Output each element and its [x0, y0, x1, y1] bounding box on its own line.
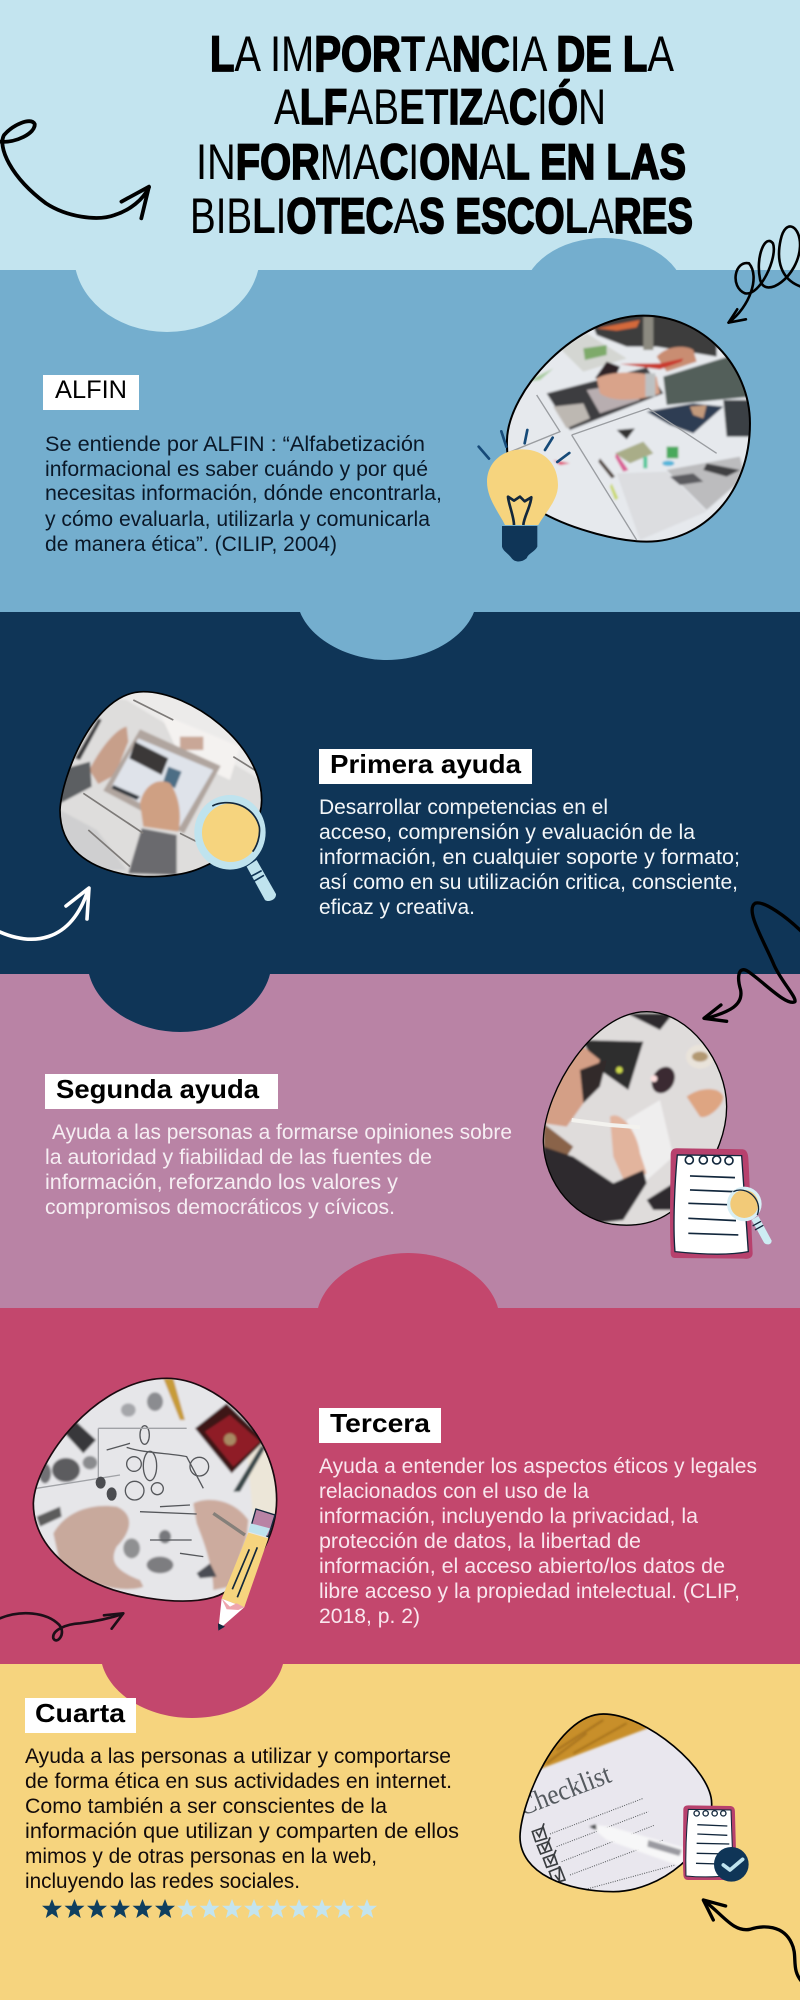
text: ALFIN definition: informacional es saber cuándo y por qué: [45, 458, 428, 481]
icon: notepad with magnifier: [670, 1148, 772, 1259]
text: ALFIN definition: y cómo evaluarla, utilizarla y comunicarla: [45, 508, 430, 531]
text: Primera ayuda description: eficaz y creativa.: [319, 896, 475, 919]
text: Tercera description: información, el acceso abierto/los datos de: [319, 1555, 725, 1578]
text: Primera ayuda description: información, en cualquier soporte y formato;: [319, 846, 740, 869]
photo: woman with pen at desk: [540, 1010, 730, 1230]
text: Segunda ayuda description: la autoridad y fiabilidad de las fuentes de: [45, 1146, 432, 1169]
photo: jewellery sketches: [32, 1377, 280, 1607]
text: Segunda ayuda description: información, reforzando los valores y: [45, 1171, 398, 1194]
panel: Cuarta background: [0, 1664, 800, 2000]
label: ALFIN: ALFIN: [55, 376, 127, 404]
text: Tercera description: libre acceso y la propiedad intelectual. (CLIP,: [319, 1580, 740, 1603]
arrow: black squiggle to Segunda photo: [704, 903, 800, 1021]
icon: notepad with check badge: [683, 1805, 749, 1882]
title: BIBLIOTECAS ESCOLARES: [190, 188, 693, 244]
title: [190, 26, 693, 244]
text: ALFIN definition: necesitas información, dónde encontrarla,: [45, 482, 442, 505]
photo: hand on tablet: [57, 690, 267, 880]
icon: pencil: [218, 1509, 275, 1631]
text: Tercera description: Ayuda a entender los aspectos éticos y legales: [319, 1455, 757, 1478]
text: Cuarta description: incluyendo las redes sociales.: [25, 1870, 300, 1893]
text: Primera ayuda description: acceso, comprensión y evaluación de la: [319, 821, 695, 844]
text: Tercera description: protección de datos, la libertad de: [319, 1530, 641, 1553]
text: ALFIN definition: Se entiende por ALFIN : “Alfabetización: [45, 433, 425, 456]
photo: checklist with pen: [514, 1710, 717, 1897]
text: Cuarta description: mimos y de otras personas en la web,: [25, 1845, 377, 1868]
label: Primera ayuda: Primera ayuda: [330, 749, 522, 779]
text: Primera ayuda description: así como en su utilización critica, consciente,: [319, 871, 738, 894]
text: ALFIN definition: [45, 433, 442, 556]
text: Segunda ayuda description: compromisos democráticos y cívicos.: [45, 1196, 395, 1219]
panel: header background: [0, 0, 800, 270]
icon: light bulb: [479, 430, 569, 562]
text: Segunda ayuda description: [45, 1121, 512, 1219]
arrow: header right scribble: [729, 226, 800, 323]
panel: Primera ayuda background: [0, 612, 800, 975]
text: Cuarta description: Ayuda a las personas a utilizar y comportarse: [25, 1745, 451, 1768]
text: Cuarta description: [25, 1745, 459, 1893]
arrow: raspberry squiggle: [0, 1613, 123, 1640]
panel: Segunda ayuda background: [0, 974, 800, 1308]
decorative bump: Tercera into Segunda: [318, 1253, 498, 1308]
panel: ALFIN background: [0, 238, 800, 612]
label: Cuarta: [25, 1698, 136, 1733]
photo: hands over magazines: [503, 310, 753, 547]
title: ALFABETIZACIÓN: [274, 79, 606, 135]
text: Tercera description: 2018, p. 2): [319, 1605, 420, 1628]
text: Segunda ayuda description: Ayuda a las personas a formarse opiniones sobre: [52, 1121, 512, 1144]
arrow: white curve: [0, 888, 89, 939]
text: Cuarta description: de forma ética en sus actividades en internet.: [25, 1770, 452, 1793]
text: Tercera description: relacionados con el uso de la: [319, 1480, 589, 1503]
title: LA IMPORTANCIA DE LA: [210, 26, 675, 82]
text: Primera ayuda description: Desarrollar competencias en el: [319, 796, 608, 819]
label: Tercera: Tercera: [330, 1408, 431, 1438]
arrow: squiggle to Cuarta photo: [703, 1900, 800, 1983]
text: Primera ayuda description: [319, 796, 740, 919]
text: Cuarta description: Como también a ser conscientes de la: [25, 1795, 387, 1818]
label: Cuarta: Cuarta: [35, 1698, 126, 1728]
text: Tercera description: [319, 1455, 757, 1628]
text: Tercera description: información, incluyendo la privacidad, la: [319, 1505, 698, 1528]
text: ALFIN definition: de manera ética”. (CILIP, 2004): [45, 533, 337, 556]
decorative bump: Tercera into Cuarta: [102, 1664, 283, 1718]
label: ALFIN: [43, 375, 139, 410]
decorative bump: ALFIN into Primera ayuda: [300, 612, 474, 660]
arrow: header left swirl: [0, 121, 149, 218]
panel: Tercera background: [0, 1308, 800, 1664]
title: INFORMACIONAL EN LAS: [196, 134, 686, 190]
decorative notch: header into ALFIN: [74, 178, 260, 332]
label: Tercera: [319, 1408, 441, 1443]
text: Cuarta description: información que utilizan y comparten de ellos: [25, 1820, 459, 1843]
icon: magnifying glass: [194, 795, 276, 901]
rating stars: [42, 1899, 377, 1918]
decorative bump: Primera into Segunda: [89, 974, 270, 1032]
label: Segunda ayuda: Segunda ayuda: [56, 1074, 260, 1104]
photo: checklist with pen: Checklist: [514, 1759, 616, 1823]
